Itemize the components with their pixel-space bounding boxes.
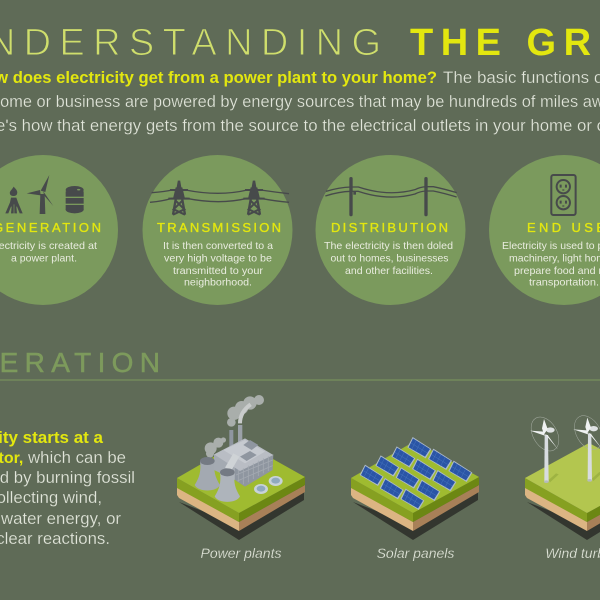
icon: transmission pylons — [150, 181, 289, 215]
panel: transmission: It is then converted to a — [163, 240, 273, 252]
panel: generation: a power plant. — [11, 252, 77, 264]
panel: end use — [489, 155, 600, 305]
panel: distribution — [316, 155, 466, 305]
building — [214, 454, 235, 480]
chimneys — [229, 430, 233, 447]
label: power plants: Power plants — [201, 545, 281, 561]
panel: transmission: very high voltage to be — [164, 252, 272, 264]
panel: transmission: neighborhood. — [184, 276, 252, 288]
panel: distribution: DISTRIBUTION — [331, 220, 448, 235]
icon: utility poles — [325, 179, 457, 215]
panel: transmission — [142, 155, 292, 305]
panel: transmission: TRANSMISSION — [157, 220, 281, 235]
icon: electrical outlet — [551, 175, 576, 215]
label: solar panels: Solar panels — [377, 545, 454, 561]
exhaust discs — [254, 484, 268, 494]
generation description — [0, 428, 135, 548]
panel: end use: transportation. — [529, 276, 599, 288]
panel: distribution: and other facilities. — [345, 265, 433, 277]
panel: transmission: transmitted to your — [173, 265, 264, 277]
illustration: power plant tile — [177, 395, 305, 540]
panel: distribution: The electricity is then doled — [324, 240, 453, 252]
intro text — [0, 68, 600, 135]
illustration: solar panels tile — [351, 437, 479, 540]
icon: gas flame, wind turbine and oil barrel — [5, 175, 84, 214]
panel: generation — [0, 155, 118, 305]
illustration: wind turbines tile — [525, 411, 600, 540]
smoke — [205, 395, 264, 458]
title — [0, 22, 600, 64]
panel: distribution: out to homes, businesses — [330, 252, 448, 264]
cooling towers — [195, 461, 220, 490]
